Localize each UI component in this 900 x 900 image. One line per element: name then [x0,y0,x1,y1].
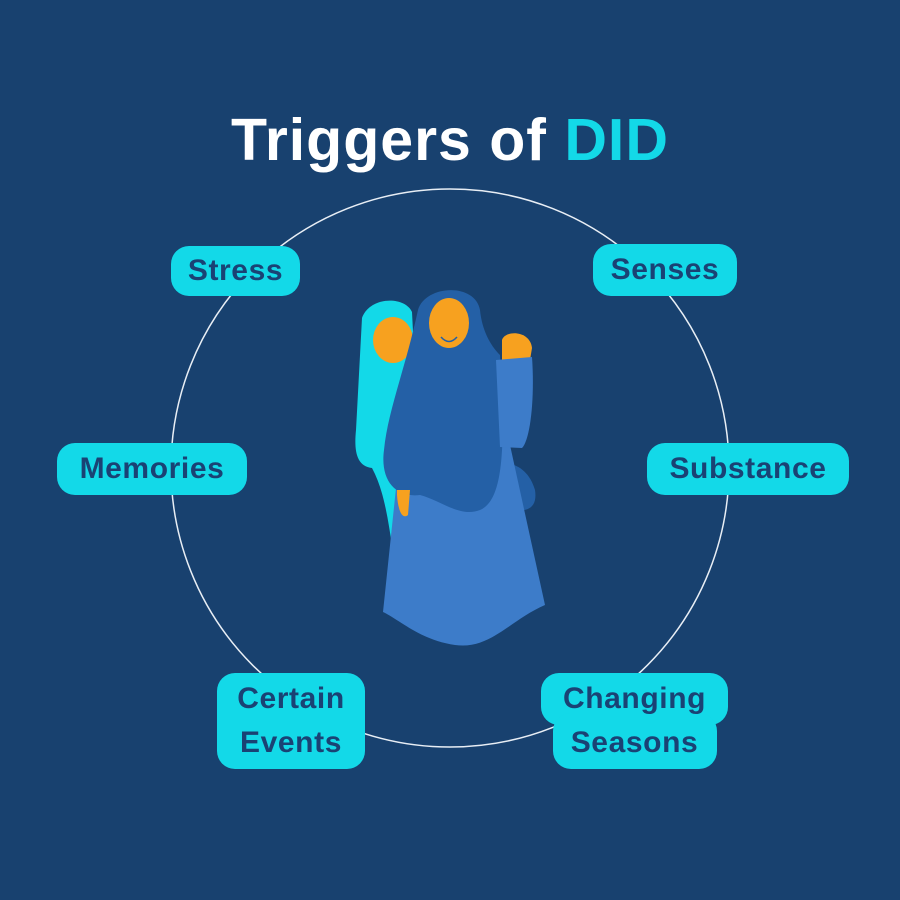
label: Stress [171,246,300,296]
label: Changing Seasons: Changing [563,682,706,715]
title: Triggers of DID [231,107,669,173]
label: Changing Seasons: Seasons [571,726,698,759]
label: Senses [593,244,737,296]
label: Certain Events [217,673,365,769]
label: Memories [57,443,247,495]
label: Certain Events: Certain [237,682,345,715]
label: Changing Seasons [541,673,728,769]
label: Stress: Stress [188,254,283,287]
label: Certain Events: Events [240,726,342,759]
label: Senses: Senses [611,253,719,286]
label: Substance: Substance [669,452,827,485]
label: Substance [647,443,849,495]
label: Memories: Memories [80,452,224,485]
